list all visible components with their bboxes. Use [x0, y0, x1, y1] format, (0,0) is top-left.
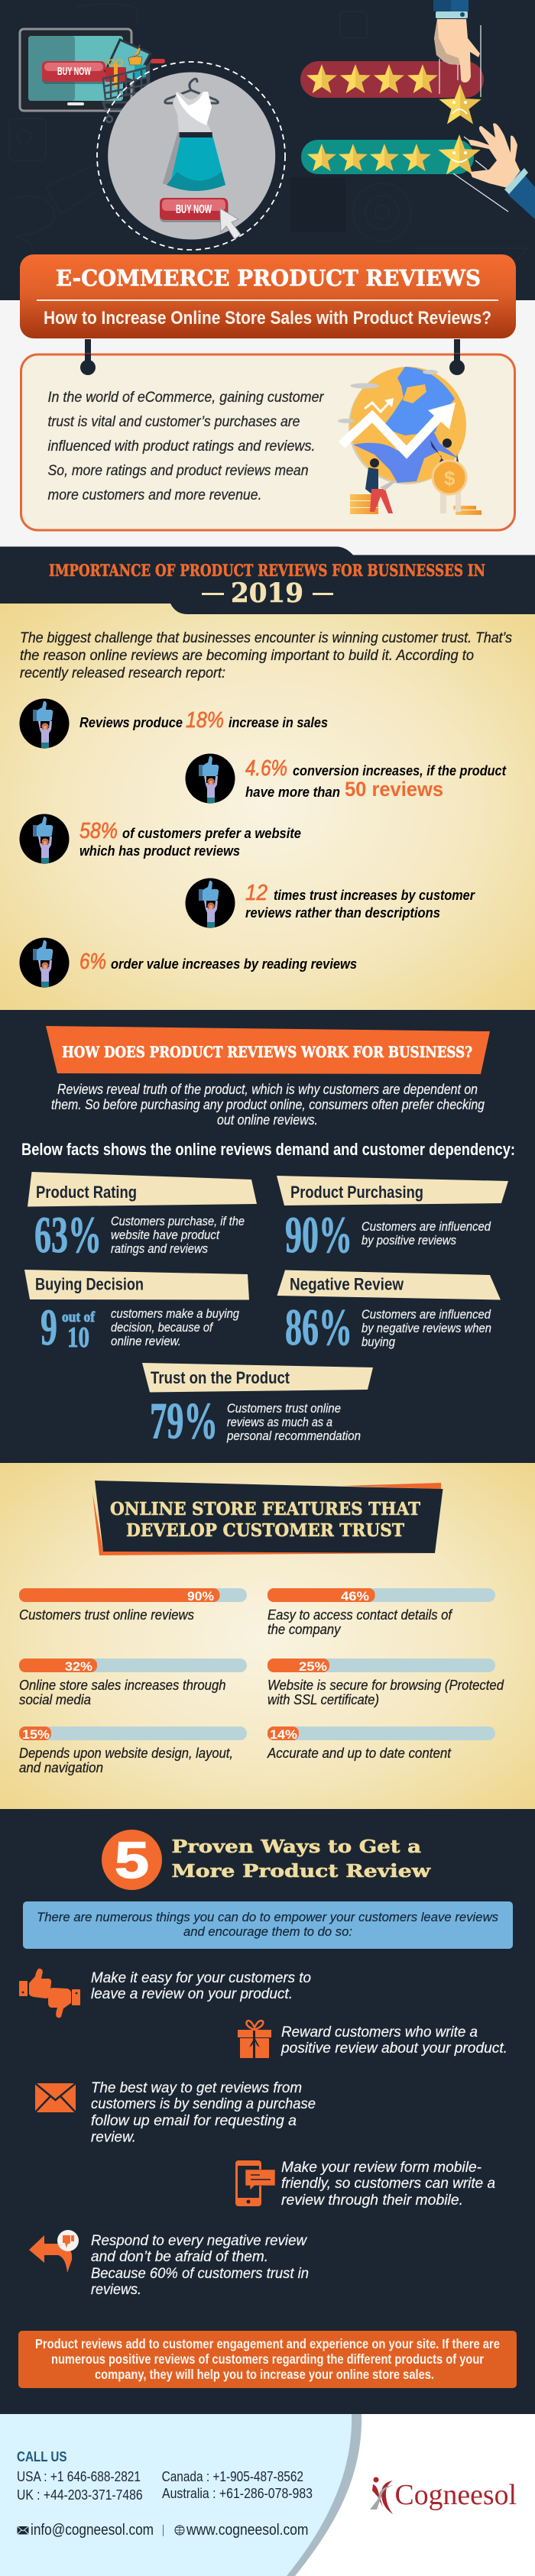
way 5: respond to negative reviews: Because 60% of customers trust in: [91, 2266, 309, 2282]
stat: 4.6% and 50 reviews: 4.6%: [245, 756, 287, 781]
stat: 4.6% and 50 reviews: 50 reviews: [345, 778, 443, 801]
illustration: globe with growth arrow: $: [444, 467, 456, 490]
how reviews work intro: out online reviews.: [217, 1112, 318, 1128]
way 3: follow up email: follow up email for requesting a: [91, 2113, 297, 2129]
blue callout: and encourage them to do so:: [183, 1924, 352, 1939]
feature bar: 25%: [268, 1659, 504, 1707]
fact: negative review: by negative reviews when: [362, 1322, 491, 1335]
fact: buying decision: Buying Decision: [35, 1274, 144, 1294]
importance intro text: [20, 630, 512, 681]
stat: 18%: increase in sales: [229, 715, 328, 730]
stat: 4.6% and 50 reviews: [185, 753, 507, 804]
way 4: mobile friendly: friendly, so customers can write a: [281, 2176, 495, 2192]
fact: negative review: 86%: [285, 1298, 352, 1356]
intro text: So, more ratings and product reviews mean: [47, 463, 309, 479]
year 2019: 2019: [231, 578, 303, 609]
call us heading: CALL US: [17, 2449, 67, 2464]
icon: phone with speech bubble: [235, 2160, 275, 2206]
hero: computer and shopping cart: [20, 29, 165, 123]
feature bar: 90%: Customers trust online reviews: [19, 1607, 194, 1623]
section heading: online store features: [92, 1481, 443, 1555]
hero background doodles: [9, 4, 527, 275]
fact: buying decision: online review.: [111, 1335, 181, 1348]
way 4: mobile friendly: [235, 2160, 495, 2209]
intro text: trust is vital and customer’s purchases are: [47, 414, 300, 430]
stat: 4.6% and 50 reviews: conversion increases, if the product: [293, 763, 507, 778]
way 1: make it easy: [19, 1969, 311, 2018]
hero: dress circle: [97, 62, 285, 250]
stat: 12 times: [185, 879, 475, 927]
fact: negative review: [277, 1270, 501, 1356]
how reviews work intro: them. So before purchasing any product online, consumers often prefer checking: [51, 1097, 485, 1112]
feature bar: 15%: [19, 1727, 247, 1775]
feature bar: 90%: 90%: [187, 1589, 214, 1604]
blue callout: [23, 1901, 513, 1949]
feature bar: 15%: 15%: [22, 1727, 50, 1742]
feature bar: 25%: with SSL certificate): [268, 1692, 379, 1707]
icon: reply arrow with thumbs down: [29, 2230, 79, 2273]
how reviews work intro: Reviews reveal truth of the product, which is why customers are dependent on: [57, 1082, 478, 1097]
importance intro text: the reason online reviews are becoming important to build it. According to: [20, 648, 474, 664]
fact: trust on the product: Trust on the Product: [151, 1368, 290, 1387]
intro text: more customers and more revenue.: [47, 487, 261, 503]
button: buy now on screen: BUY NOW: [57, 65, 92, 78]
stat: 18%: Reviews produce: [79, 715, 183, 730]
illustration: globe with growth arrow: [338, 367, 481, 515]
hero: pinching hand: [468, 123, 535, 219]
stat: 12 times: times trust increases by customer: [274, 888, 475, 903]
phone numbers: Australia : +61-286-078-983: [162, 2485, 313, 2501]
way 5: respond to negative reviews: and don’t be afraid of them.: [91, 2249, 268, 2265]
feature bar: 32%: Online store sales increases through: [19, 1678, 226, 1693]
section heading: 5 proven ways: More Product Review: [171, 1861, 431, 1882]
stat: 12 times: 12: [245, 881, 268, 905]
main title: E-COMMERCE PRODUCT REVIEWS: [56, 265, 481, 291]
fact: product purchasing: Customers are influenced: [362, 1220, 491, 1234]
feature bar: 14%: [267, 1727, 495, 1761]
fact: negative review: buying: [362, 1335, 396, 1349]
phone numbers: Canada : +1-905-487-8562: [162, 2468, 303, 2484]
button: buy now on screen: [42, 61, 105, 84]
feature bar: 46%: [268, 1588, 495, 1637]
feature bar: 25%: 25%: [299, 1659, 327, 1674]
feature bar: 15%: Depends upon website design, layout,: [19, 1746, 233, 1761]
fact: buying decision: 10: [67, 1322, 89, 1354]
feature bar: 32%: [19, 1659, 247, 1707]
intro text: In the world of eCommerce, gaining customer: [47, 390, 324, 406]
fact: product purchasing: by positive reviews: [362, 1234, 456, 1248]
stat: 58%: [20, 814, 301, 863]
way 3: follow up email: The best way to get reviews from: [91, 2080, 302, 2096]
section heading: how does product reviews work: [46, 1026, 490, 1074]
title banner: [20, 254, 516, 338]
way 1: make it easy: Make it easy for your customers to: [91, 1970, 311, 1986]
fact: product rating: website have product: [111, 1228, 220, 1242]
fact: buying decision: out of: [62, 1309, 96, 1325]
way 3: follow up email: review.: [91, 2130, 136, 2145]
intro text: [47, 390, 324, 503]
importance intro text: recently released research report:: [20, 665, 225, 681]
fact: trust on the product: reviews as much as a: [227, 1416, 332, 1429]
fact: product purchasing: Product Purchasing: [290, 1183, 423, 1202]
fact: product rating: Product Rating: [36, 1183, 137, 1202]
way 4: mobile friendly: review through their mobile.: [281, 2193, 463, 2209]
fact: product rating: [28, 1172, 257, 1264]
stat: 18%: 18%: [186, 708, 224, 733]
way 5: respond to negative reviews: reviews.: [91, 2282, 141, 2298]
how reviews work intro: [51, 1082, 485, 1128]
stat: 4.6% and 50 reviews: have more than: [245, 785, 340, 800]
connector pins: [80, 339, 465, 375]
intro panel: [21, 354, 515, 530]
fact: product rating: Customers purchase, if the: [111, 1215, 245, 1228]
section heading: 5 proven ways: [102, 1830, 431, 1890]
section heading: online store features: ONLINE STORE FEATURES THAT: [110, 1499, 420, 1519]
way 4: mobile friendly: Make your review form mobile-: [281, 2160, 481, 2176]
fact: product rating: ratings and reviews: [111, 1242, 208, 1256]
blue callout: There are numerous things you can do to empower your customers leave reviews: [37, 1910, 498, 1924]
phone numbers: UK : +44-203-371-7486: [17, 2487, 143, 2503]
fact: product purchasing: [277, 1176, 508, 1264]
email and website: info@cogneesol.com: [31, 2522, 154, 2539]
cursor arrow: [220, 209, 241, 239]
way 2: reward customers: [238, 2021, 507, 2058]
feature bar: 15%: and navigation: [19, 1760, 103, 1775]
stat: 58%: which has product reviews: [79, 843, 240, 859]
fact: trust on the product: 79%: [150, 1392, 218, 1450]
stat: 58%: 58%: [79, 819, 118, 843]
fact: buying decision: customers make a buying: [111, 1307, 240, 1321]
phone numbers: [17, 2468, 313, 2503]
phone numbers: USA : +1 646-688-2821: [17, 2468, 141, 2484]
footer contact panel: [0, 2414, 362, 2576]
section heading: online store features: DEVELOP CUSTOMER TRUST: [126, 1520, 404, 1541]
way 5: respond to negative reviews: Respond to every negative review: [91, 2233, 307, 2249]
fact: buying decision: 9: [41, 1298, 57, 1356]
email and website: [17, 2522, 309, 2539]
section heading: 5 proven ways: 5: [115, 1832, 149, 1889]
fact: product purchasing: 90%: [285, 1205, 352, 1264]
icon: envelope: [35, 2083, 76, 2112]
button: buy now: BUY NOW: [176, 203, 212, 216]
fact: negative review: Customers are influenced: [362, 1308, 491, 1322]
hero: pointing hand: [433, 0, 480, 83]
feature bar: 46%: the company: [268, 1622, 341, 1637]
section heading: 5 proven ways: Proven Ways to Get a: [171, 1837, 421, 1857]
fact: trust on the product: [142, 1363, 373, 1450]
stat: 6%: order value increases by reading reviews: [111, 956, 357, 972]
section: importance heading banner: [0, 547, 535, 614]
feature bar: 25%: Website is secure for browsing (Protected: [268, 1678, 504, 1693]
fact: trust on the product: Customers trust online: [227, 1402, 341, 1416]
way 2: reward customers: Reward customers who write a: [281, 2024, 478, 2040]
feature bar: 46%: 46%: [341, 1589, 369, 1604]
fact: buying decision: [24, 1270, 249, 1356]
fact: buying decision: decision, because of: [111, 1321, 214, 1335]
feature bar: 90%: [19, 1588, 247, 1623]
email and website: www.cogneesol.com: [186, 2522, 309, 2539]
stat: 6%: [20, 938, 357, 987]
orange conclusion callout: company, they will help you to increase your online store sales.: [95, 2367, 434, 2382]
cogneesol logo: Cogneesol: [394, 2479, 517, 2511]
feature bar: 46%: Easy to access contact details of: [268, 1607, 453, 1623]
orange conclusion callout: [18, 2331, 517, 2388]
fact: product rating: 63%: [34, 1205, 102, 1264]
button: buy now: [160, 198, 229, 222]
stat: 18%: [20, 698, 328, 749]
way 5: respond to negative reviews: [29, 2230, 309, 2298]
stat: 12 times: reviews rather than descriptions: [245, 905, 440, 921]
way 3: follow up email: [35, 2080, 316, 2145]
stat: 6%: 6%: [79, 950, 106, 974]
importance intro text: The biggest challenge that businesses encounter is winning customer trust. That’s: [20, 630, 512, 646]
way 1: make it easy: leave a review on your product.: [91, 1986, 293, 2002]
stat: 58%: of customers prefer a website: [122, 826, 301, 841]
hero: rating bars: [300, 25, 508, 212]
fact: negative review: Negative Review: [290, 1274, 404, 1294]
feature bar: 32%: social media: [19, 1692, 91, 1707]
fact: trust on the product: personal recommendation: [226, 1429, 361, 1443]
feature bar: 14%: 14%: [270, 1727, 297, 1742]
feature bar: 32%: 32%: [65, 1659, 92, 1674]
icon: thumbs up and down: [19, 1969, 80, 2018]
way 2: reward customers: positive review about your product.: [280, 2040, 507, 2057]
year 2019: [202, 578, 333, 609]
intro text: influenced with product ratings and reviews.: [47, 439, 315, 455]
way 3: follow up email: customers is by sending a purchase: [91, 2096, 316, 2112]
feature bar: 14%: Accurate and up to date content: [267, 1746, 452, 1761]
icon: gift box: [238, 2021, 271, 2058]
